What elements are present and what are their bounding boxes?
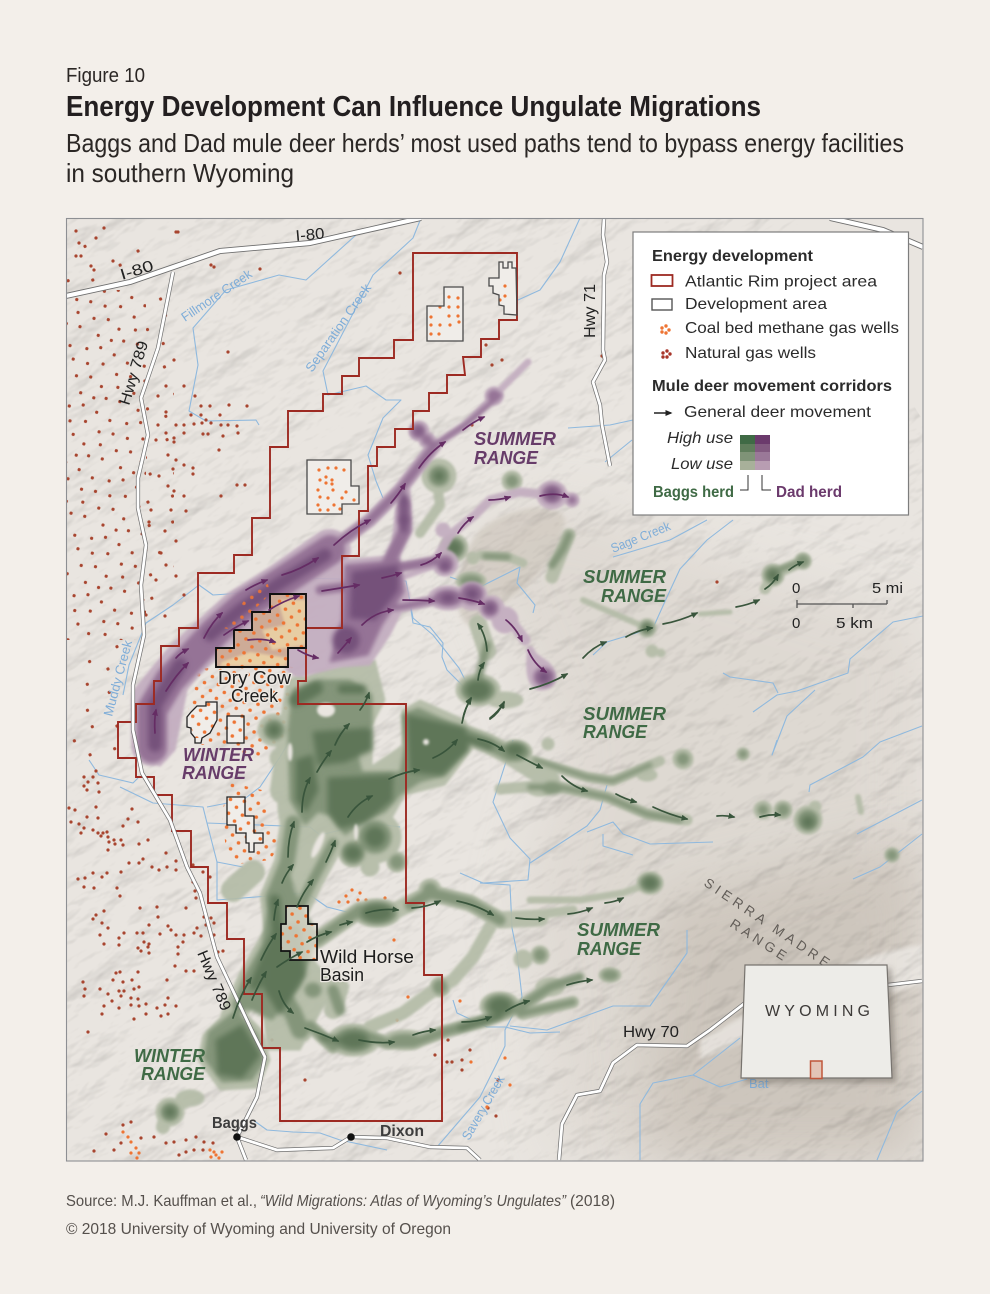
source note: © 2018 University of Wyoming and University of Oregon: [66, 1221, 451, 1238]
purple medium use layer: [152, 390, 576, 748]
coal bed methane well fields: [123, 648, 510, 1158]
legend: energy development: [652, 248, 899, 362]
range labels: Baggs herd: [134, 566, 667, 1084]
legend: mule deer movement corridors: Low use: [671, 456, 733, 473]
development area fills: [187, 262, 517, 960]
highway labels: [117, 225, 679, 1041]
legend: energy development: Atlantic Rim project area: [685, 274, 877, 290]
map frame: [66, 218, 923, 1161]
creek labels: Muddy Creek: [100, 638, 135, 718]
scale bar: [792, 580, 903, 632]
subtitle: Baggs and Dad mule deer herds’ most used paths tend to bypass energy facilities: [66, 128, 904, 158]
source note: “Wild Migrations: Atlas of Wyoming’s Ungulates”: [260, 1193, 567, 1210]
legend: mule deer movement corridors: High use: [667, 430, 733, 447]
legend: mule deer movement corridors: Dad herd: [776, 484, 842, 501]
legend: mule deer movement corridors: Mule deer movement corridors: [652, 378, 892, 395]
purple high use layer: [155, 428, 557, 745]
Sierra Madre Range label: RANGE: [727, 916, 789, 963]
creek labels: Fillmore Creek: [178, 266, 255, 324]
green medium use layer: [161, 466, 897, 1121]
range labels: Baggs herd: RANGE: [577, 938, 642, 959]
range labels: Baggs herd: SUMMER: [577, 919, 661, 940]
legend: mule deer movement corridors: [652, 378, 892, 501]
title: Energy Development Can Influence Ungulate Migrations: [66, 91, 761, 123]
towns: Baggs: [212, 1115, 257, 1132]
range labels: Baggs herd: SUMMER: [583, 566, 667, 587]
source note: [66, 1193, 615, 1238]
purple low use layer: [135, 362, 579, 766]
towns: Dixon: [380, 1123, 424, 1140]
rivers: [89, 218, 923, 1160]
source note: (2018): [570, 1193, 615, 1210]
development area outlines: [187, 262, 517, 960]
development area names: Creek: [231, 686, 279, 706]
range labels: Dad herd: RANGE: [182, 762, 247, 783]
highway labels: Hwy 71: [582, 284, 599, 338]
legend: energy development: Natural gas wells: [685, 345, 816, 362]
range labels: Baggs herd: WINTER: [134, 1045, 206, 1066]
range labels: Dad herd: WINTER: [183, 744, 255, 765]
highway labels: Hwy 70: [623, 1024, 679, 1041]
range labels: Dad herd: RANGE: [474, 447, 539, 468]
wells inside development areas: [191, 286, 505, 960]
development area names: Dry Cow: [218, 668, 292, 688]
creek labels: [100, 266, 769, 1142]
range labels: Dad herd: SUMMER: [474, 428, 557, 449]
Dry Cow development area fill: [216, 584, 306, 667]
legend: mule deer movement corridors: General deer movement: [684, 404, 872, 421]
highway labels: Hwy 789: [117, 339, 152, 407]
Baggs herd corridors (green): [156, 459, 899, 1127]
highway labels: Hwy 789: [193, 948, 234, 1013]
Sierra Madre Range label: SIERRA MADRE: [701, 875, 832, 970]
green high use layer: [165, 471, 814, 1117]
creek labels: Separation Creek: [302, 281, 374, 375]
green low use layer: [156, 459, 899, 1127]
figure label: Figure 10: [66, 65, 145, 87]
natural gas wells: [66, 228, 717, 1155]
development area names: Wild Horse: [320, 947, 414, 967]
scale bar: 0: [792, 580, 800, 597]
highway labels: I-80: [295, 225, 326, 245]
Atlantic Rim project boundary: [118, 253, 517, 1121]
legend: energy development: Coal bed methane gas wells: [685, 320, 899, 337]
creek labels: Savery Creek: [459, 1072, 508, 1142]
roads: [66, 218, 923, 1160]
legend: energy development: Energy development: [652, 248, 814, 265]
Wyoming locator inset: [741, 965, 892, 1078]
Dad herd corridors (purple): [135, 362, 579, 766]
Wyoming locator inset: WYOMING: [765, 1003, 870, 1020]
scale bar: 0: [792, 615, 800, 632]
towns: [212, 1115, 424, 1141]
range labels: Baggs herd: RANGE: [141, 1063, 206, 1084]
creek labels: Bat: [749, 1076, 769, 1091]
scale bar: 5 mi: [872, 580, 903, 597]
development area names: Basin: [320, 965, 364, 985]
source note: Source: M.J. Kauffman et al.,: [66, 1193, 257, 1210]
legend: mule deer movement corridors: Baggs herd: [653, 484, 734, 501]
scale bar: 5 km: [836, 615, 873, 632]
range labels: Dad herd: [182, 428, 557, 783]
place labels: [100, 225, 832, 1142]
green movement arrows: [233, 562, 803, 1043]
legend: energy development: Development area: [685, 296, 827, 313]
development area names: [218, 668, 414, 985]
highway labels: I-80: [118, 257, 156, 284]
subtitle: [66, 128, 904, 188]
range labels: Baggs herd: SUMMER: [583, 703, 667, 724]
range labels: Baggs herd: RANGE: [583, 721, 648, 742]
green corridor gaps: [288, 703, 429, 859]
range labels: Baggs herd: RANGE: [601, 585, 667, 606]
purple movement arrows: [155, 417, 568, 733]
terrain base: [66, 218, 923, 1161]
map panel: [66, 218, 923, 1161]
subtitle: in southern Wyoming: [66, 158, 294, 188]
legend: [633, 232, 908, 515]
creek labels: Sage Creek: [609, 518, 673, 556]
